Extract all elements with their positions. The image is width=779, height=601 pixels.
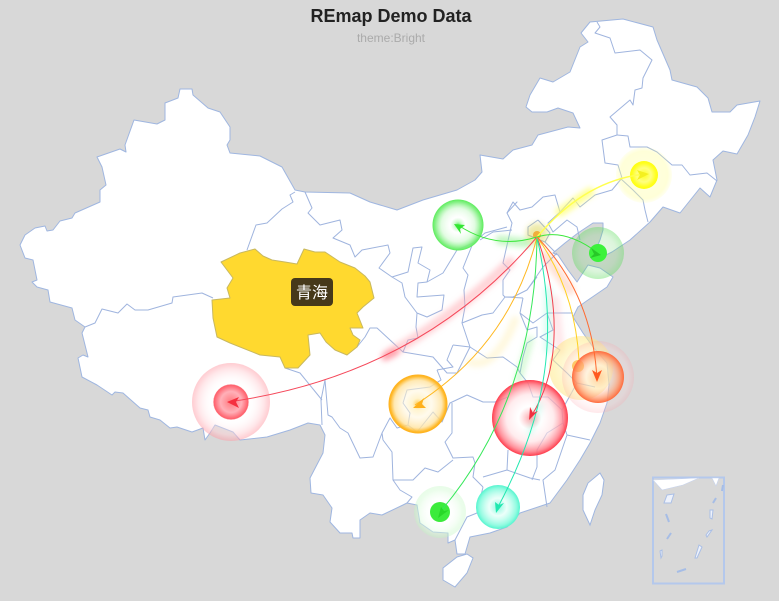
flow lines from Beijing [228,174,645,512]
map: Qinghai highlighted [212,249,374,368]
tooltip label: Qinghai [291,278,333,306]
inset frame [653,478,724,584]
line to Guangdong [498,237,548,507]
origin glow: Beijing [526,223,548,245]
marker: Tibet red [192,363,270,441]
marker: Guangxi green [414,486,466,538]
province borders [85,22,717,540]
marker: Zhejiang orange-red [562,341,634,413]
line to Hubei [530,237,554,418]
marker: Anhui yellow halo [549,336,613,400]
marker: Liaoning green [572,227,624,279]
line to Anhui [537,237,579,360]
glow segments of flow lines [385,192,590,432]
line to Shanxi [458,225,537,241]
line to Jilin [537,174,645,237]
title: REmap Demo Data [310,6,473,26]
inset islands [660,494,713,558]
Taiwan [583,473,604,525]
Hainan [443,554,473,587]
marker: Hubei/Jiangxi red [492,380,568,456]
line to Zhejiang [537,237,597,380]
inset: South China Sea islands [653,478,724,584]
marker: Heilongjiang/Jilin yellow [616,147,672,203]
tooltip label: Qinghai: 青海 [296,284,328,302]
arrowheads [227,170,649,518]
marker: Guangdong teal [476,485,520,529]
line to Guangxi [440,237,537,512]
marker: Guizhou/Chongqing orange [388,374,448,434]
line to Liaoning [537,235,598,253]
line to Tibet [228,237,537,402]
line to Guizhou [415,237,537,405]
marker: Shanxi green [432,200,484,250]
subtitle: theme:Bright [357,31,426,45]
inset coast [653,478,719,490]
